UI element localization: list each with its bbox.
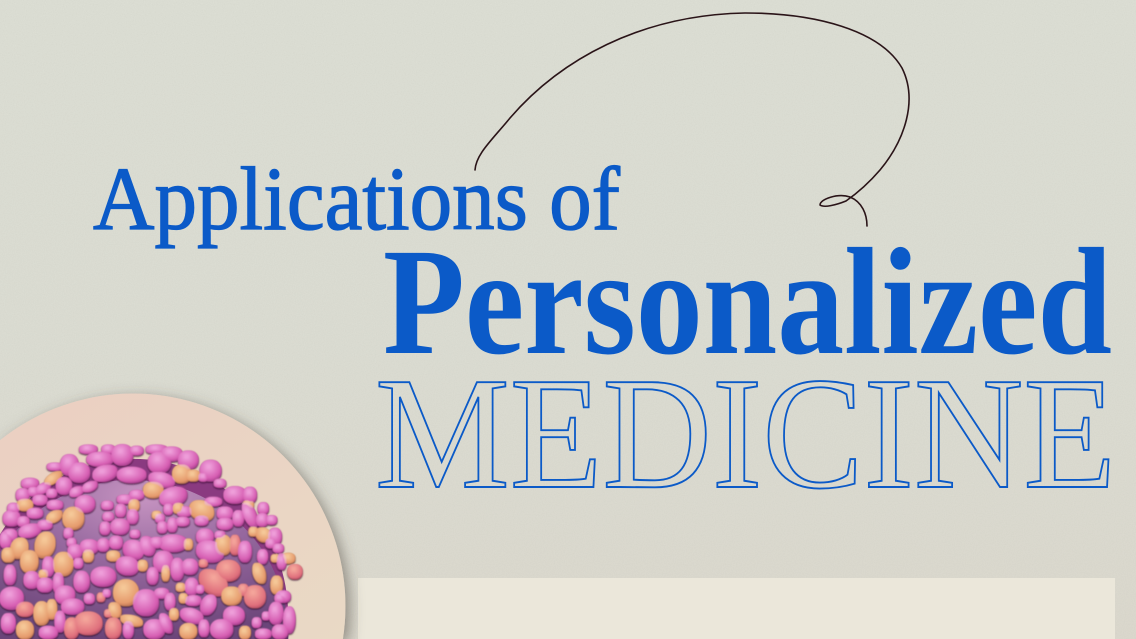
icon: cancer cell sphere bbox=[0, 445, 302, 639]
bottom content panel bbox=[358, 578, 1115, 639]
curved hand-drawn line bbox=[475, 13, 909, 226]
circular cell image bbox=[0, 394, 345, 639]
heading: Applications of: Applications of bbox=[93, 150, 620, 249]
heading: MEDICINE outlined: MEDICINE bbox=[375, 344, 1116, 522]
